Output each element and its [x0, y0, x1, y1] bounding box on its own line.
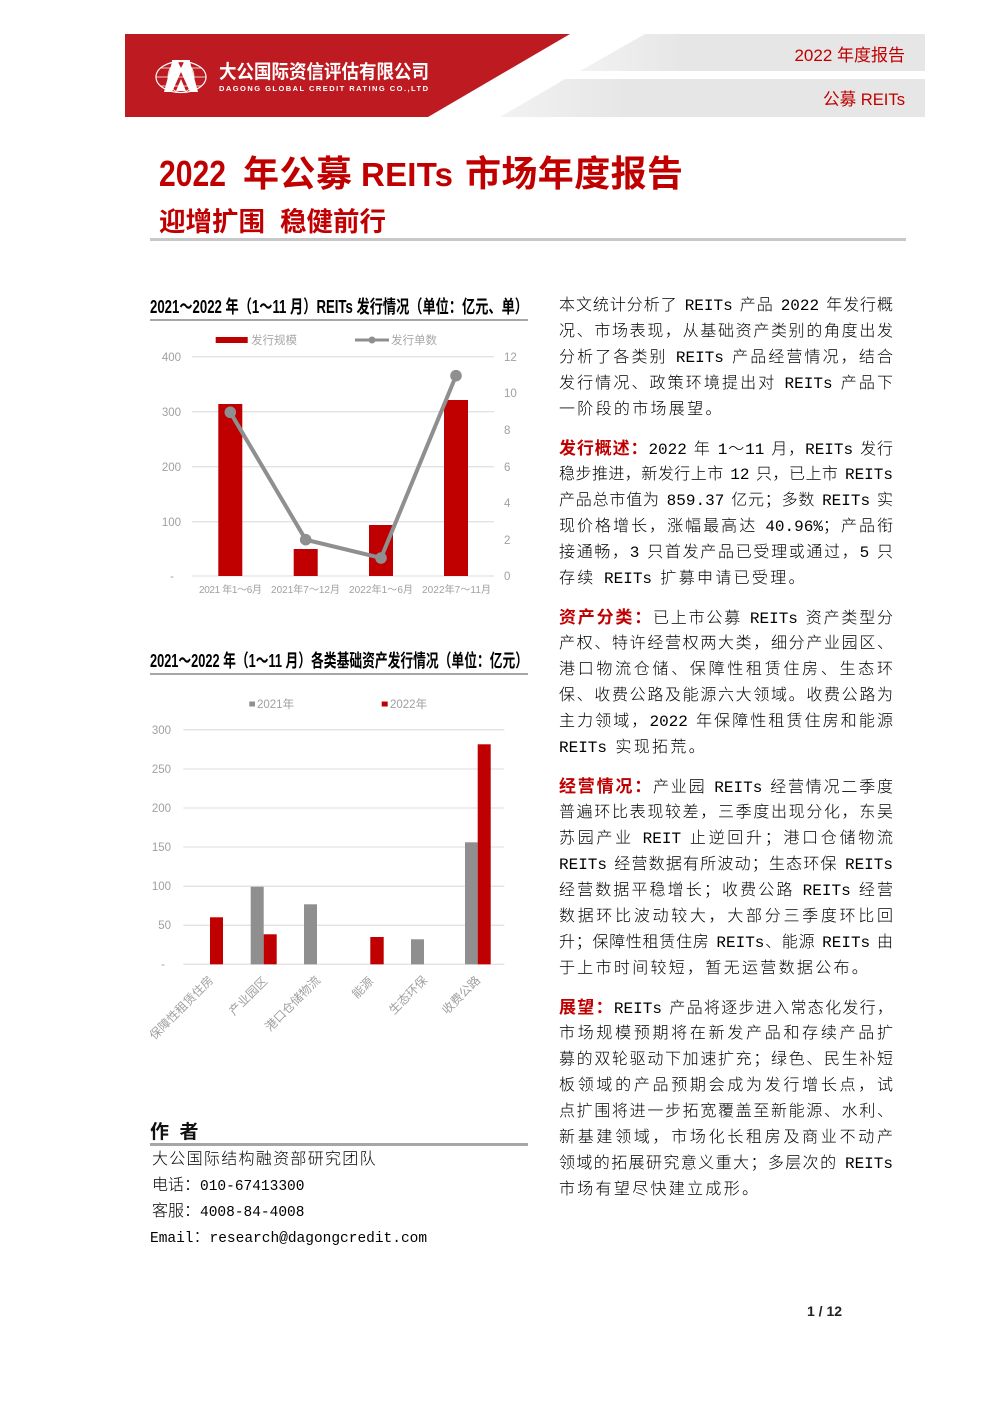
right axis: 2: [504, 535, 510, 547]
text block: outlook: 市场规模预期将在新发产品和存续产品扩: [559, 1025, 893, 1043]
text block: operations: 经营情况：产业园 REITs 经营情况二季度: [559, 777, 893, 797]
legend: 发行规模: [251, 333, 297, 347]
text block: asset classes: 资产分类：已上市公募 REITs 资产类型分: [559, 608, 893, 628]
y axis: 200: [152, 803, 171, 815]
category labels: 生态环保: [386, 973, 430, 1017]
bars: [218, 400, 468, 576]
text block: operations: 普遍环比表现较差，三季度出现分化，东吴: [559, 804, 893, 822]
text block: issuance overview: 现价格增长，涨幅最高达 40.96%；产品衔: [559, 518, 893, 536]
text block: outlook: 板领域的产品预期会成为发行增长点，试: [559, 1077, 893, 1095]
legend: [216, 333, 437, 347]
text block: asset classes: 保、收费公路及能源六大领域。收费公路为: [559, 687, 893, 705]
right axis: 10: [504, 388, 517, 400]
header banner: [125, 34, 925, 117]
author details: 大公国际结构融资部研究团队: [152, 1151, 377, 1169]
line series: [224, 370, 462, 564]
author details: Email：research@dagongcredit.com: [150, 1229, 427, 1247]
left axis: 400: [162, 352, 181, 364]
x labels: 2021 年1～6月: [199, 583, 262, 596]
text block: outlook: 募的双轮驱动下加速扩充；绿色、民生补短: [559, 1051, 893, 1069]
x labels: 2022年7～11月: [422, 583, 491, 596]
text block: issuance overview: 接通畅，3 只首发产品已受理或通过，5 只: [559, 544, 893, 562]
y axis: 50: [158, 920, 171, 932]
title: 市场年度报告: [465, 153, 683, 194]
left axis: [162, 352, 181, 583]
right axis: 8: [504, 425, 510, 437]
text block: issuance overview: 产品总市值为 859.37 亿元；多数 REITs 实: [559, 492, 893, 510]
right axis: 12: [504, 352, 517, 364]
icon: company logo: [156, 61, 206, 92]
y axis: [152, 725, 171, 971]
text block: outlook: 点扩围将进一步拓宽覆盖至新能源、水利、: [559, 1103, 893, 1121]
text block: operations: REITs 经营数据有所波动；生态环保 REITs: [559, 856, 893, 874]
legend: 2021年: [257, 697, 294, 711]
legend: [249, 697, 427, 711]
text block: asset classes: 主力领域，2022 年保障性租赁住房和能源: [559, 713, 893, 731]
page number: 1 / 12: [807, 1303, 842, 1319]
text block: asset classes: REITs 实现拓荒。: [559, 739, 707, 757]
company name: [219, 61, 429, 93]
text block: operations: 升；保障性租赁住房 REITs、能源 REITs 由: [559, 934, 893, 952]
y axis: 300: [152, 725, 171, 737]
text block: outlook: [559, 998, 893, 1199]
left axis: 200: [162, 462, 181, 474]
category labels: 产业园区: [226, 974, 270, 1018]
left axis: 100: [162, 517, 181, 529]
text block: introduction: 况、市场表现，从基础资产类别的角度出发: [559, 323, 893, 341]
legend: 2022年: [390, 697, 427, 711]
text block: outlook: 新基建领域，市场化长租房及商业不动产: [559, 1129, 893, 1147]
company name: 大公国际资信评估有限公司: [219, 61, 429, 83]
title: REITs: [361, 156, 453, 193]
bars 2021: [251, 842, 478, 964]
category labels: [146, 973, 483, 1043]
text block: outlook: 市场有望尽快建立成形。: [559, 1181, 760, 1199]
subtitle: 迎增扩围: [159, 207, 265, 237]
text block: introduction: 发行情况、政策环境提出对 REITs 产品下: [559, 375, 893, 393]
text block: introduction: [559, 296, 893, 419]
text block: operations: 苏园产业 REIT 止逆回升；港口仓储物流: [559, 830, 893, 848]
author heading: 作 者: [150, 1121, 199, 1143]
y axis: 150: [152, 842, 171, 854]
right axis: [504, 352, 517, 583]
legend: 发行单数: [391, 333, 437, 347]
category labels: 收费公路: [439, 973, 483, 1017]
author details: 客服：4008-84-4008: [152, 1203, 304, 1221]
text block: operations: [559, 777, 893, 978]
right axis: 6: [504, 462, 510, 474]
y axis: -: [161, 959, 165, 971]
text block: asset classes: 产权、特许经营权两大类，细分产业园区、: [559, 635, 893, 653]
text block: issuance overview: [559, 439, 893, 588]
y axis: 250: [152, 764, 171, 776]
left axis: 300: [162, 407, 181, 419]
chart: issuance scale and count: [162, 333, 517, 596]
text block: operations: 经营数据平稳增长；收费公路 REITs 经营: [559, 882, 893, 900]
text block: introduction: 一阶段的市场展望。: [559, 401, 724, 419]
y axis: 100: [152, 881, 171, 893]
right axis: 4: [504, 498, 511, 510]
header label: annual report: 2022 年度报告: [794, 46, 905, 65]
author details: 电话：010-67413300: [152, 1177, 304, 1195]
text block: issuance overview: 存续 REITs 扩募申请已受理。: [559, 570, 807, 588]
right axis: 0: [504, 571, 510, 583]
text block: introduction: 分析了各类别 REITs 产品经营情况，结合: [559, 349, 893, 367]
text block: issuance overview: 发行概述：2022 年 1～11 月，REITs 发行: [559, 439, 893, 459]
text block: outlook: 展望：REITs 产品将逐步进入常态化发行，: [559, 998, 893, 1018]
subtitle: 稳健前行: [280, 207, 386, 237]
x labels: 2021年7～12月: [271, 583, 340, 596]
title: [159, 153, 683, 237]
text block: outlook: 领域的拓展研究意义重大；多层次的 REITs: [559, 1155, 893, 1173]
x labels: 2022年1～6月: [349, 583, 413, 596]
x labels: [199, 583, 491, 596]
bars 2022: [210, 744, 491, 964]
category labels: 港口仓储物流: [262, 973, 323, 1034]
text block: asset classes: [559, 608, 893, 757]
text block: operations: 于上市时间较短，暂无运营数据公布。: [559, 960, 870, 978]
text block: asset classes: 港口物流仓储、保障性租赁住房、生态环: [559, 661, 893, 679]
text block: introduction: 本文统计分析了 REITs 产品 2022 年发行概: [559, 297, 893, 315]
company name: DAGONG GLOBAL CREDIT RATING CO.,LTD: [219, 84, 429, 93]
title: 年公募: [243, 153, 352, 194]
category labels: 能源: [349, 974, 376, 1001]
header label: public REITs: 公募 REITs: [823, 90, 905, 109]
left axis: -: [170, 571, 174, 583]
text block: issuance overview: 稳步推进，新发行上市 12 只，已上市 REITs: [559, 466, 893, 484]
chart: issuance by asset class: [150, 697, 504, 1043]
text block: operations: 数据环比波动较大，大部分三季度环比回: [559, 908, 893, 926]
title: 2022: [159, 153, 226, 194]
author details: [150, 1150, 427, 1247]
subtitle: [159, 207, 386, 237]
